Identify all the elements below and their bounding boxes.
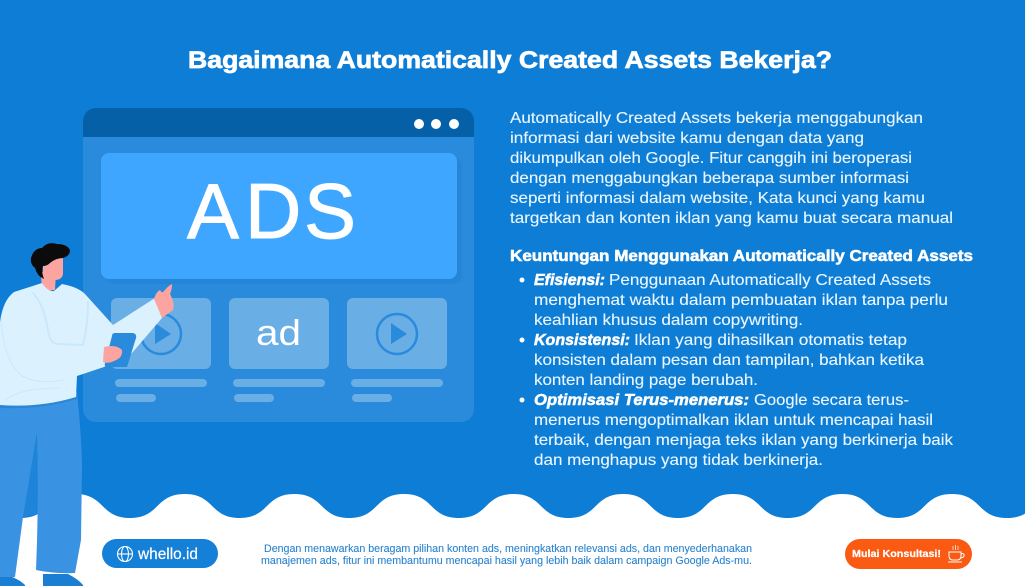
placeholder text lines xyxy=(115,379,443,402)
person presenting xyxy=(0,243,174,586)
icon: globe xyxy=(118,546,132,562)
intro paragraph xyxy=(510,110,953,227)
hand holding phone xyxy=(103,346,122,363)
icon: coffee cup xyxy=(948,545,964,562)
bullet: konsistensi xyxy=(520,332,924,389)
bullet: optimisasi terus-menerus: dan menghapus yang tidak berkinerja. xyxy=(534,452,823,469)
wave footer background xyxy=(0,494,1025,586)
hair xyxy=(31,243,70,279)
bullet: efisiensi: Penggunaan Automatically Created Assets xyxy=(609,272,931,289)
bullet: optimisasi terus-menerus xyxy=(520,392,953,469)
intro paragraph: dikumpulkan oleh Google. Fitur canggih ini beroperasi xyxy=(510,150,912,167)
sweater xyxy=(0,283,162,406)
ad thumbnail middle xyxy=(229,298,329,369)
bullet: efisiensi: Efisiensi: xyxy=(534,272,605,289)
consultation button: Mulai Konsultasi! xyxy=(852,548,941,560)
neck xyxy=(41,272,56,291)
main ADS banner: ADS xyxy=(187,167,356,255)
bullet: efisiensi: menghemat waktu dalam pembuatan iklan tanpa perlu xyxy=(534,292,948,309)
window title bar xyxy=(83,108,474,137)
browser window illustration xyxy=(83,108,474,422)
footer summary text xyxy=(261,543,752,567)
waist shadow xyxy=(0,396,77,408)
window body xyxy=(83,108,474,422)
consultation button xyxy=(845,539,972,569)
footer summary text: manajemen ads, fitur ini membantumu mencapai hasil yang lebih baik dalam campaign Google Ads-mu. xyxy=(261,555,752,567)
intro paragraph: informasi dari website kamu dengan data yang xyxy=(510,130,864,147)
intro paragraph: targetkan dan konten iklan yang kamu buat secara manual xyxy=(510,210,953,227)
bullet: efisiensi xyxy=(520,272,948,329)
website badge xyxy=(102,539,218,568)
pointing hand xyxy=(154,284,174,318)
video thumbnail left xyxy=(111,298,211,369)
benefits list xyxy=(520,272,953,469)
ad thumbnail middle: ad xyxy=(256,312,301,353)
bullet: efisiensi: keahlian khusus dalam copywriting. xyxy=(534,312,803,329)
video thumbnail right xyxy=(347,298,447,369)
footer summary text: Dengan menawarkan beragam pilihan konten ads, meningkatkan relevansi ads, dan menyederhanakan xyxy=(264,543,752,555)
shoes xyxy=(0,574,83,586)
title: Bagaimana Automatically Created Assets Bekerja? xyxy=(188,47,832,74)
bullet: optimisasi terus-menerus: Google secara terus- xyxy=(754,392,909,409)
phone xyxy=(105,333,136,367)
main ADS banner xyxy=(101,153,462,284)
bullet: optimisasi terus-menerus: menerus mengoptimalkan iklan untuk mencapai hasil xyxy=(534,412,933,429)
bullet: optimisasi terus-menerus: terbaik, dengan menjaga teks iklan yang berkinerja baik xyxy=(534,432,953,449)
website badge: whello.id xyxy=(137,546,198,563)
bullet: optimisasi terus-menerus: Optimisasi Terus-menerus: xyxy=(534,392,749,409)
face xyxy=(43,256,63,280)
benefits heading: Keuntungan Menggunakan Automatically Created Assets xyxy=(510,248,973,265)
trousers inner shadow xyxy=(23,425,40,517)
bullet: konsistensi: konten landing page berubah. xyxy=(534,372,758,389)
bullet: konsistensi: Konsistensi: xyxy=(534,332,630,349)
intro paragraph: dengan menggabungkan beberapa sumber informasi xyxy=(510,170,909,187)
bullet: konsistensi: Iklan yang dihasilkan otomatis tetap xyxy=(634,332,907,349)
window control dots xyxy=(414,119,459,129)
intro paragraph: Automatically Created Assets bekerja menggabungkan xyxy=(510,110,923,127)
bullet: konsistensi: konsisten dalam pesan dan tampilan, bahkan ketika xyxy=(534,352,924,369)
trousers xyxy=(0,392,82,578)
intro paragraph: seperti informasi dalam website, Kata kunci yang kamu xyxy=(510,190,925,207)
sweater folds xyxy=(1,293,88,400)
